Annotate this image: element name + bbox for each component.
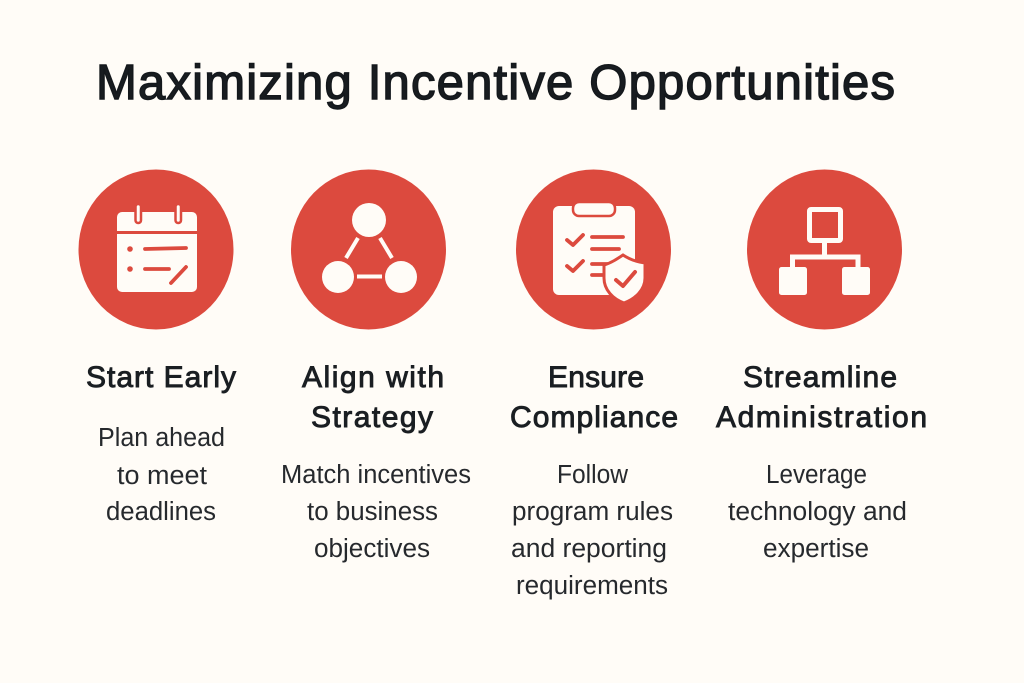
heading bbox=[510, 361, 678, 434]
panel: align with strategy bbox=[281, 170, 471, 563]
description: Leverage bbox=[766, 461, 867, 489]
description bbox=[728, 461, 907, 563]
description: expertise bbox=[763, 535, 869, 563]
description: to business bbox=[307, 498, 438, 526]
description bbox=[511, 461, 673, 600]
description: objectives bbox=[314, 535, 430, 563]
description: and reporting bbox=[511, 535, 667, 563]
description: deadlines bbox=[106, 498, 216, 526]
description: Match incentives bbox=[281, 461, 471, 489]
heading: Administration bbox=[716, 401, 927, 434]
description: to meet bbox=[117, 462, 207, 490]
heading: Align with bbox=[302, 361, 444, 394]
heading: Strategy bbox=[311, 401, 433, 434]
description: technology and bbox=[728, 498, 907, 526]
icon: clipboard with shield bbox=[516, 170, 671, 330]
icon: calendar bbox=[78, 170, 234, 330]
heading: Streamline bbox=[743, 361, 897, 394]
panel: start early bbox=[78, 170, 236, 526]
description bbox=[98, 424, 225, 526]
description bbox=[281, 461, 471, 563]
description: Follow bbox=[557, 461, 629, 489]
heading bbox=[716, 361, 927, 434]
heading: Ensure bbox=[548, 361, 644, 394]
title: Maximizing Incentive Opportunities bbox=[96, 56, 895, 110]
description: Plan ahead bbox=[98, 424, 225, 452]
panel: ensure compliance bbox=[510, 170, 678, 600]
heading bbox=[302, 361, 444, 434]
description: requirements bbox=[516, 572, 668, 600]
icon: network triangle bbox=[291, 170, 446, 330]
description: program rules bbox=[512, 498, 673, 526]
heading: Start Early bbox=[86, 361, 236, 394]
heading: Compliance bbox=[510, 401, 678, 434]
panel: streamline administration bbox=[716, 170, 927, 563]
icon: org chart bbox=[747, 170, 902, 330]
